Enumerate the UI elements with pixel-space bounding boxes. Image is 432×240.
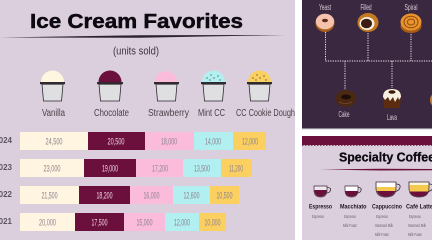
icon: yeast donut: [316, 14, 334, 32]
column: cappuccino: Cappuccino: [372, 204, 402, 210]
connector lines: [326, 32, 432, 90]
column: cafe latte: Milk Foam: [408, 232, 422, 237]
row: 2023: [0, 159, 252, 177]
column: espresso: [309, 204, 332, 219]
row: 2022: 12,600: [184, 190, 200, 200]
icon: cookie dough cup: [247, 70, 272, 101]
icon: cappuccino cup: [376, 182, 400, 197]
icon: spiral roll: [400, 14, 422, 33]
column: macchiato: [340, 204, 366, 228]
column: macchiato: Milk Foam: [343, 223, 357, 228]
icon: partial donut: [430, 92, 432, 108]
row: 2021: 12,000: [174, 218, 190, 228]
label: yeast: Yeast: [319, 2, 331, 12]
row: 2022: 16,000: [144, 190, 160, 200]
icon: vanilla cup: [40, 70, 65, 101]
row: 2023: 11,200: [229, 164, 243, 174]
subtitle: (units sold): [113, 46, 159, 58]
icon: filled donut: [358, 13, 378, 32]
label: lava: Lava: [387, 112, 397, 122]
icon: cafe latte cup: [409, 182, 432, 197]
icon: strawberry cup: [154, 71, 179, 101]
row: 2024: 18,000: [161, 136, 177, 146]
title: Ice Cream Favorites: [30, 10, 243, 33]
column: cappuccino: [372, 204, 402, 237]
icon: espresso cup: [314, 186, 331, 197]
row: 2021: 10,000: [204, 218, 220, 228]
label: spiral: Spiral: [404, 2, 418, 12]
row: 2022: 18,200: [96, 190, 112, 200]
column: cappuccino: Milk Foam: [375, 232, 389, 237]
heading underline: [320, 169, 432, 170]
row: 2021: [0, 213, 226, 231]
icon: cake donut: [336, 90, 356, 107]
row: 2024: [0, 132, 266, 150]
title underline: [0, 35, 285, 38]
label: strawberry: Strawberry: [148, 108, 189, 119]
label: filled: Filled: [360, 2, 372, 12]
row: 2023: 19,000: [102, 164, 118, 174]
row: 2021: 17,500: [92, 218, 108, 228]
row: 2023: 17,200: [152, 164, 168, 174]
column: macchiato: Macchiato: [340, 204, 366, 210]
row: 2023: 23,000: [44, 164, 60, 174]
label: mint cc: Mint CC: [198, 108, 225, 119]
column: macchiato: Espresso: [344, 214, 356, 219]
label: vanilla: Vanilla: [42, 108, 65, 119]
column: cappuccino: Espresso: [376, 214, 388, 219]
row: 2022: 10,500: [216, 190, 232, 200]
row: 2023: 13,500: [194, 164, 210, 174]
icon: lava cake: [383, 89, 401, 108]
panel: ice cream favorites: [0, 0, 295, 240]
row: 2021: 15,000: [136, 218, 152, 228]
label: chocolate: Chocolate: [94, 108, 129, 119]
row: 2021: 20,000: [39, 218, 56, 228]
label: cake: Cake: [338, 109, 350, 119]
column: cafe latte: [406, 204, 432, 237]
row: 2022: [0, 186, 239, 204]
column: cafe latte: Espresso: [409, 214, 421, 219]
panel: donut types: [302, 0, 432, 129]
row: 2024: 12,000: [242, 136, 258, 146]
icon: macchiato cup: [345, 186, 361, 197]
column: cappuccino: Steamed Milk: [375, 223, 393, 228]
row: 2024: 20,500: [108, 136, 124, 146]
icon: mint chip cup: [201, 70, 226, 101]
row: 2024: 24,500: [46, 136, 62, 146]
row: 2024: 14,000: [205, 136, 221, 146]
icon: chocolate cup: [97, 70, 123, 101]
column: espresso: Espresso: [309, 204, 332, 210]
panel: specialty coffee: [302, 136, 432, 240]
row: 2022: 21,500: [42, 190, 58, 200]
label: cc cookie dough: CC Cookie Dough: [236, 108, 295, 119]
column: espresso: Espresso: [312, 214, 324, 219]
